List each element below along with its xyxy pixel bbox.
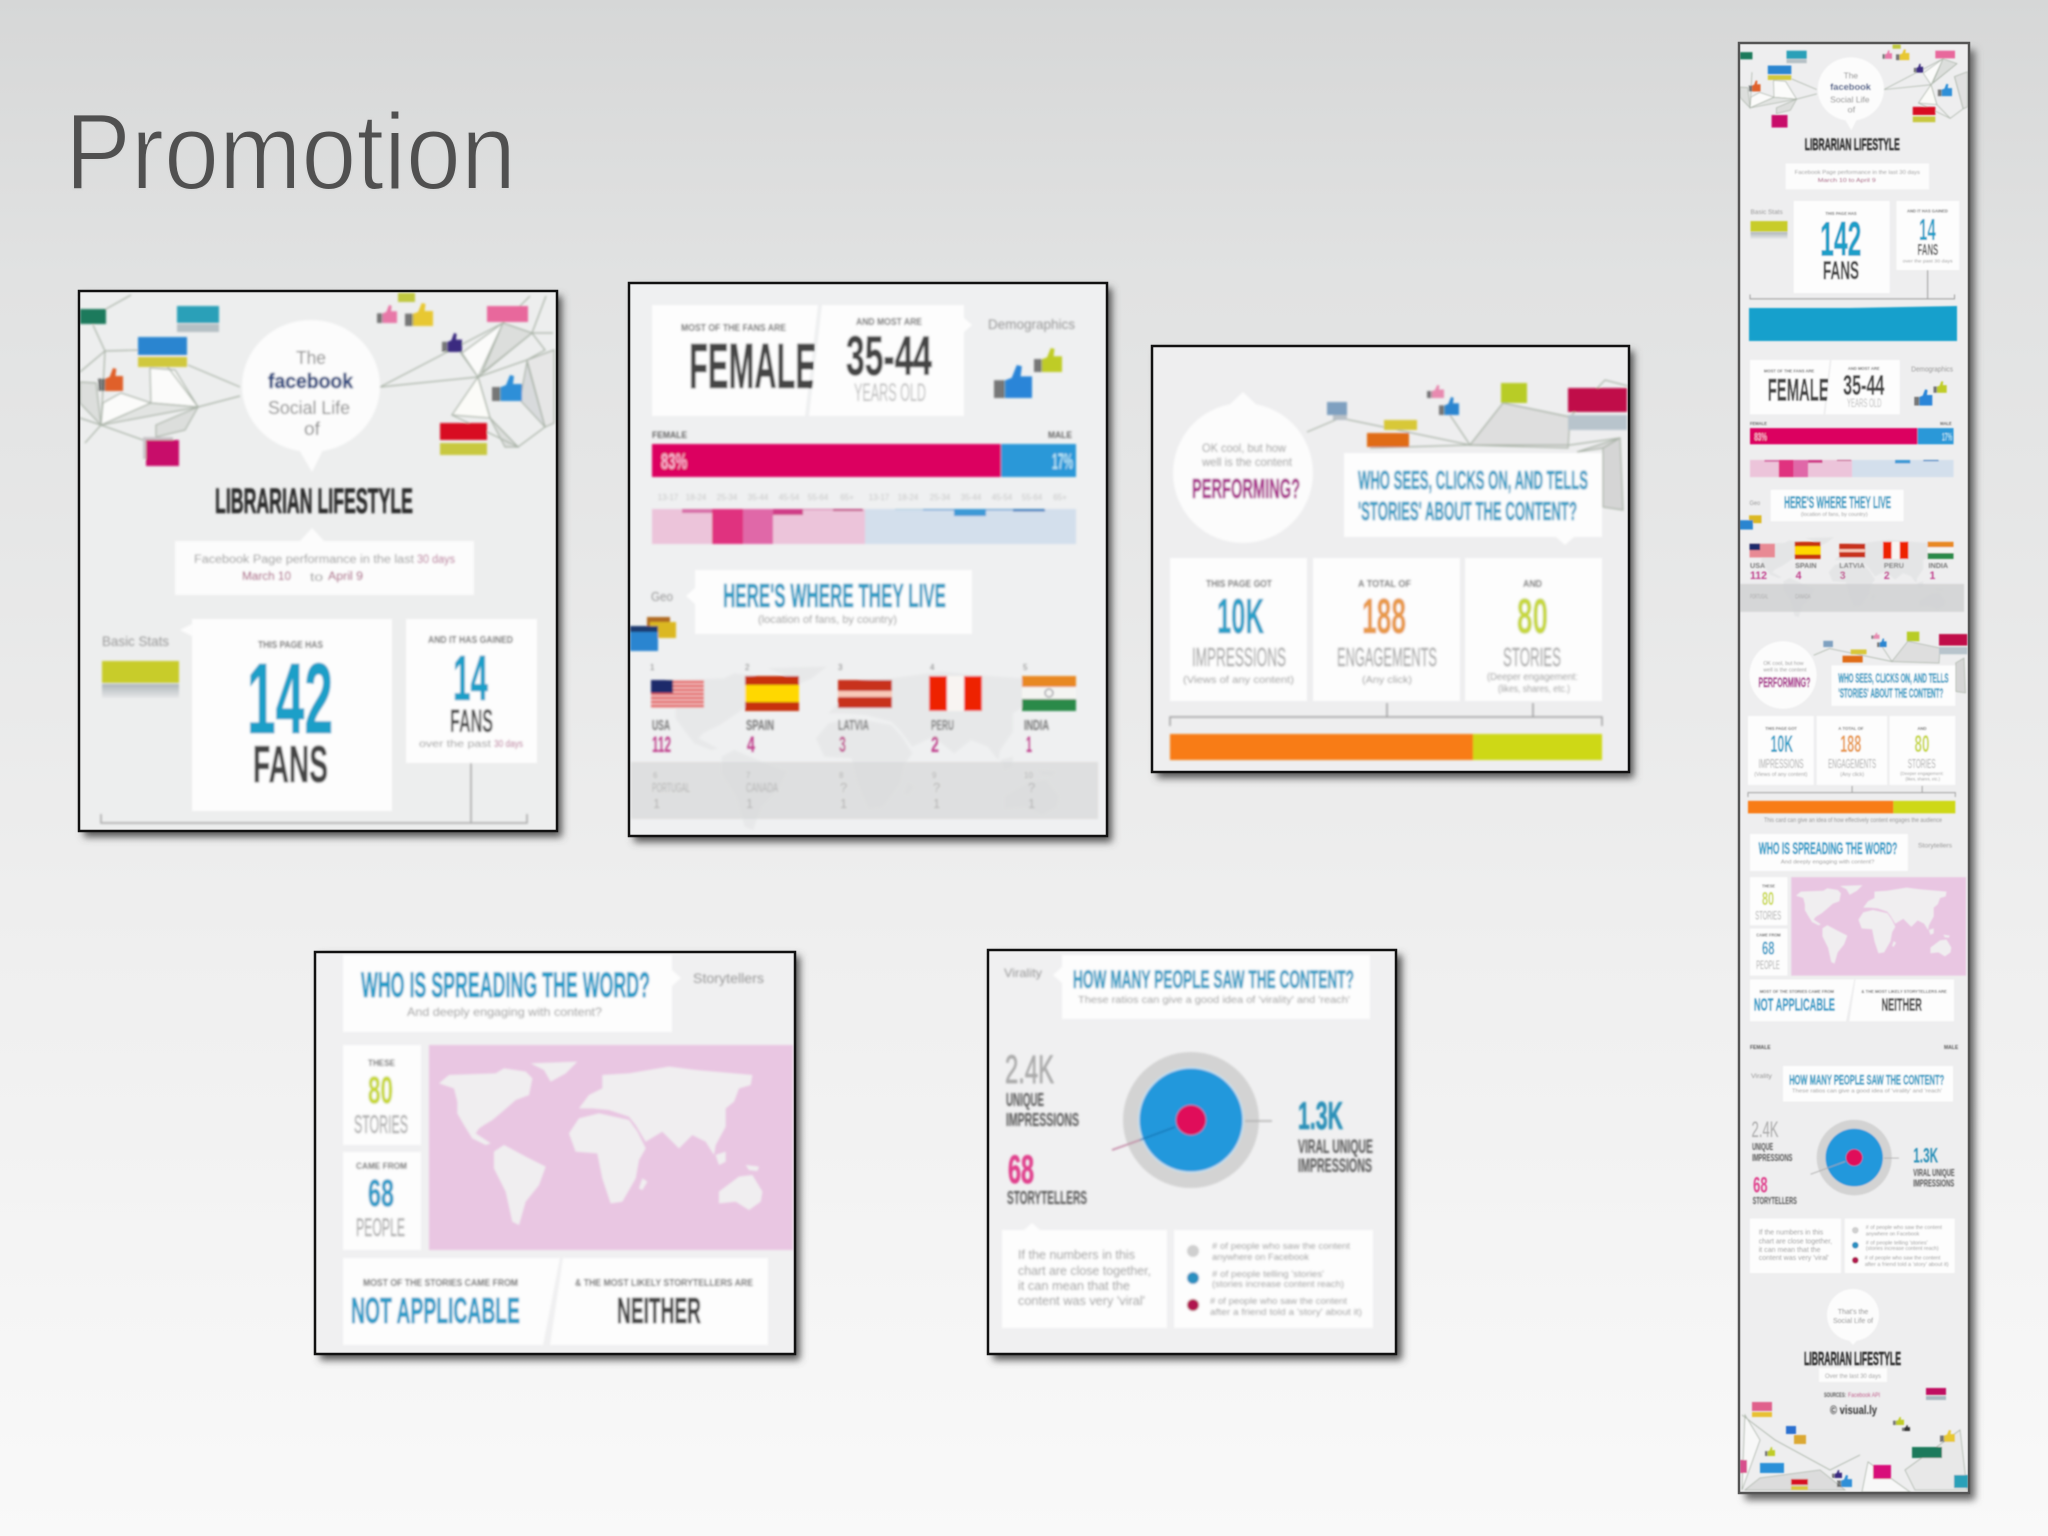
gender headline card: MOST OF THE FANS ARE [681,323,786,334]
thumbnail section: virality: chart are close together, [1759,1239,1832,1246]
stat: viral unique impressions [1298,1095,1373,1177]
thumbnail section: closing [1740,1289,1968,1492]
stat card: engagements [1313,558,1460,701]
heading card: who sees [1344,453,1602,545]
stat card: stories [1465,558,1602,701]
stat card: total fans: 142 [247,643,333,755]
thumbnail section: demographics and geography: MALE [1940,421,1952,426]
network illustration [1307,380,1628,510]
stat card: engagements: A TOTAL OF [1358,579,1411,590]
heading card: where they live: (location of fans, by country) [758,614,897,626]
result card: likely storytellers: & THE MOST LIKELY STORYTELLERS ARE [575,1278,753,1289]
stat card: fans gained [406,619,537,763]
sources line [1824,1393,1880,1399]
result card: source [343,1258,560,1345]
date range box: Facebook Page performance in the last [194,554,415,566]
thumbnail caption: engagement note: This card can give an idea of how effectively content engages the audience [1764,818,1943,824]
country: Spain [745,663,799,757]
age chart: 18-24 [898,493,919,502]
age chart: 45-54 [992,493,1013,502]
age chart: 25-34 [717,493,738,502]
date range box: March 10 [242,571,291,583]
explanation card: If the numbers in this [1018,1248,1135,1262]
faint world map [653,667,1059,830]
other countries band: 6 [653,771,658,780]
stat: unique impressions: 2.4K [1005,1048,1054,1092]
explanation card [1002,1223,1167,1328]
stat card: engagements: (Any click) [1362,674,1412,686]
thumbnail section: fans growth area [1749,306,1957,341]
stat card: total fans [192,619,392,811]
thumbnail section: demographics and geography: MOST OF THE FANS ARE [1764,369,1815,375]
virality label: Virality [1004,966,1042,980]
speech bubble: performing: OK cool, but how [1202,441,1286,455]
thumbnail section: demographics and geography: CANADA [1795,594,1811,601]
date range box: April 9 [328,571,363,583]
stat card: stories: (Deeper engagement: [1487,672,1578,683]
country: Latvia: 3 [838,663,843,672]
country: Latvia: LATVIA [838,717,869,734]
closing network [1742,1415,1967,1492]
thumbnail section: demographics and geography: USA [1750,561,1766,570]
age headline card [809,305,972,416]
thumbnail section: demographics and geography: PORTUGAL [1750,594,1768,601]
thumbnail section: virality: IMPRESSIONS [1913,1177,1954,1189]
date range box [175,528,474,595]
age headline card: YEARS OLD [854,379,926,407]
other countries band: 9 [932,771,937,780]
stat card: total fans: THIS PAGE HAS [258,640,323,651]
thumbnail section: performance: (Deeper engagement: [1900,771,1944,777]
thumbnail section: virality: These ratios can give a good idea of 'virality' and 'reach' [1792,1089,1942,1095]
stat card: stories: 80 [1517,590,1548,644]
thumbnail section: intro and fans: 142 [1820,214,1861,267]
thumbnail section: performance: OK cool, but how [1763,661,1804,667]
thumbnail section: virality: IMPRESSIONS [1752,1153,1793,1164]
timeline bracket [101,763,527,823]
basic stats label and icon [102,624,192,698]
age headline card: 35-44 [846,324,932,387]
stat card: fans gained: over the past [419,739,491,750]
heading card: who sees: WHO SEES, CLICKS ON, AND TELLS [1358,465,1588,495]
stat card: people: PEOPLE [356,1214,405,1242]
legend card [1174,1230,1373,1328]
thumbnail section: virality: # of people telling 'stories' [1866,1241,1928,1247]
stat card: fans gained: 14 [453,642,488,714]
concentric circle chart [1112,1052,1272,1188]
speech bubble: intro: The [296,348,326,368]
thumbnail section: virality: after a friend told a 'story' about it) [1865,1262,1949,1268]
country: Peru: 2 [931,732,939,757]
other countries band: 1 [746,796,753,811]
date range box: 30 days [417,554,455,566]
other countries band: PORTUGAL [652,780,690,795]
network illustration: right [380,296,554,447]
thumbnail section: demographics and geography: 17% [1942,431,1952,443]
thumbnail section: virality: (stories increase content reach) [1866,1246,1939,1252]
basic stats label and icon: Basic Stats [102,633,169,649]
result card: source: MOST OF THE STORIES CAME FROM [363,1278,518,1289]
panel: content performance [1152,346,1634,778]
heading card: where they live: HERE'S WHERE THEY LIVE [723,577,946,614]
thumbnail section: performance: 10K [1771,731,1793,757]
other countries band: ? [840,780,847,795]
stat card: impressions: IMPRESSIONS [1192,642,1286,672]
thumbnail section: storytellers: MOST OF THE STORIES CAME FROM [1760,989,1834,995]
stat: viral unique impressions: IMPRESSIONS [1298,1156,1372,1177]
world map [429,1045,793,1250]
thumbnail section: virality: VIRAL UNIQUE [1913,1167,1955,1179]
stat card: impressions: 10K [1217,590,1264,644]
stat card: stories [343,1045,421,1145]
thumbnail section: intro and fans: over the past 30 days [1903,258,1953,264]
stat: unique impressions: IMPRESSIONS [1006,1110,1079,1130]
legend card: # of people who saw the content [1210,1296,1347,1307]
thumbnail section: intro and fans: Facebook Page performance in the last 30 days [1795,170,1920,176]
country: India: 5 [1023,663,1028,672]
thumbnail section: performance: (likes, shares, etc.) [1905,777,1940,783]
thumbnail section: intro and fans: THIS PAGE HAS [1825,211,1857,217]
thumbnail section: demographics and geography: 4 [1796,570,1802,582]
thumbnail section: intro and fans: 14 [1919,212,1936,247]
floating icons [1327,383,1627,447]
thumbnail section: storytellers: THESE [1762,883,1775,888]
panel: virality [988,950,1402,1360]
other countries band: ? [933,780,940,795]
thumbnail section: demographics and geography: 1 [1930,570,1935,582]
stat card: engagements: 188 [1362,590,1406,644]
age chart: 18-24 [686,493,707,502]
stat card: stories: (likes, shares, etc.) [1498,684,1570,695]
thumbnail section: virality [1750,1066,1955,1273]
other countries band: 8 [839,771,844,780]
thumbnail section: demographics and geography: INDIA [1929,561,1949,570]
heading card: how many people: HOW MANY PEOPLE SAW THE CONTENT? [1073,966,1354,994]
heading card: who sees: 'STORIES' ABOUT THE CONTENT? [1358,496,1577,526]
thumbnail section: demographics and geography: LATVIA [1839,561,1865,570]
country: Spain: SPAIN [746,717,774,734]
result card: likely storytellers [550,1258,768,1345]
closing bubble: That's the [1838,1309,1868,1316]
age chart: 55-64 [1022,493,1043,502]
thumbnail section: virality: anywhere on Facebook [1866,1231,1920,1237]
thumbnail section: demographics and geography: Demographics [1911,367,1954,374]
country: Latvia: 3 [839,732,846,757]
network illustration: left [80,295,240,443]
sources line: SOURCES: [1824,1393,1846,1399]
speech bubble: intro: facebook [268,371,354,393]
panel: demographics and geography [629,283,1112,842]
thumbnail section: intro and fans: FANS [1823,257,1859,285]
thumbnail section: demographics and geography: YEARS OLD [1847,396,1882,410]
thumbnail section: performance: STORIES [1908,757,1936,771]
other countries band: 7 [746,771,751,780]
thumbnail section: intro and fans: LIBRARIAN LIFESTYLE [1805,135,1900,154]
thumbnail section: demographics and geography: FEMALE [1750,421,1767,426]
stat card: fans gained: AND IT HAS GAINED [428,635,513,646]
thumbnail section: intro and fans: The [1844,71,1858,81]
legend card: # of people who saw the content [1212,1241,1350,1252]
thumbnail section: performance: IMPRESSIONS [1759,757,1804,771]
age chart: 13-17 [869,493,890,502]
title: Promotion [65,91,516,213]
legend card: # of people telling 'stories' [1212,1269,1324,1280]
thumbnail section: demographics and geography [1739,360,1964,617]
thumbnail section: demographics and geography: Geo [1750,500,1761,507]
thumbnail section: virality: content was very 'viral' [1759,1255,1829,1262]
age headline card: AND MOST ARE [856,317,922,328]
stat card: impressions: THIS PAGE GOT [1206,579,1272,590]
speech bubble: performing [1173,392,1313,543]
bracket lines [1170,703,1602,726]
stat card: impressions: (Views of any content) [1183,674,1294,686]
gender split bar [652,430,1076,477]
thumbnail section: performance: A TOTAL OF [1838,726,1864,732]
other countries band: CANADA [746,780,778,795]
gender split bar: 83% [661,449,687,474]
visual.ly logo: © visual.ly [1830,1403,1877,1417]
country: Spain: 4 [747,732,755,757]
thumbnail section: performance: PERFORMING? [1759,675,1810,690]
thumbnail small labels [1750,1045,1959,1051]
sources line: Facebook API [1848,1393,1880,1399]
thumbnail section: demographics and geography: 112 [1750,570,1767,582]
thumbnail section: performance: well is the content [1762,668,1807,674]
thumbnail section: virality: it can mean that the [1759,1247,1821,1254]
stat card: fans gained: FANS [450,703,493,739]
thumbnail section: demographics and geography: 83% [1754,431,1767,443]
stat card: people: 68 [368,1173,394,1215]
panel: facebook social life intro [79,291,562,837]
legend card: after a friend told a 'story' about it) [1210,1307,1362,1318]
thumbnail section: virality: If the numbers in this [1759,1230,1824,1237]
closing bubble: Social Life of [1833,1318,1873,1325]
panel: storytellers [315,952,800,1360]
country: India: INDIA [1024,717,1049,734]
age chart: 55-64 [808,493,829,502]
thumbnail small labels: FEMALE [1750,1045,1771,1051]
thumbnail section: storytellers: Storytellers [1918,842,1952,849]
result card: likely storytellers: NEITHER [617,1290,701,1331]
other countries band [631,762,1098,819]
thumbnail section: demographics and geography: 2 [1884,570,1890,582]
country: USA [650,663,704,757]
heading: page name: LIBRARIAN LIFESTYLE [215,482,413,521]
thumbnail section: storytellers: PEOPLE [1756,958,1780,972]
age chart: 65+ [1053,493,1067,502]
thumbnail section: demographics and geography: 35-44 [1843,369,1884,400]
thumbnail section: demographics and geography: HERE'S WHERE THEY LIVE [1784,495,1891,512]
stat card: impressions [1170,558,1307,701]
thumbnail section: virality: 68 [1753,1172,1768,1198]
thumbnail section: storytellers: And deeply engaging with content? [1781,859,1874,865]
closing bubble [1827,1289,1879,1345]
other countries band: 1 [653,796,660,811]
stat: storytellers [1007,1148,1087,1208]
stat card: stories: STORIES [1503,642,1561,672]
thumbnail section: virality: STORYTELLERS [1753,1196,1797,1207]
heading card: where they live [686,570,972,634]
explanation card: content was very 'viral' [1018,1294,1145,1308]
country: India [1022,663,1076,757]
top five countries [650,663,1076,757]
age chart: 25-34 [930,493,951,502]
stat: storytellers: 68 [1008,1148,1034,1192]
country: India: 1 [1026,732,1032,757]
thumbnail section: performance: THIS PAGE GOT [1765,726,1797,732]
thumbnail section: performance: AND [1917,726,1927,732]
stat card: stories: THESE [368,1058,395,1068]
thumbnail section: storytellers: 68 [1762,937,1774,958]
legend card: anywhere on Facebook [1212,1252,1309,1263]
thumbnail section: performance: 188 [1840,731,1861,757]
thumbnail section: virality: Virality [1751,1073,1773,1080]
closing icons [1740,1388,1968,1490]
other countries band: 10 [1024,771,1033,780]
thumbnail section: storytellers [1750,834,1966,1021]
thumbnail section: performance: ENGAGEMENTS [1828,757,1876,771]
stat: viral unique impressions: 1.3K [1298,1095,1343,1138]
thumbnail section: virality: # of people who saw the content [1866,1225,1943,1231]
thumbnail section: demographics and geography: 3 [1840,570,1846,582]
thumbnail section: performance: (Views of any content) [1754,772,1808,778]
thumbnail section: storytellers: 80 [1762,888,1774,909]
country: USA: 112 [652,732,671,757]
thumbnail section: virality: 2.4K [1752,1117,1779,1142]
thumbnail section: virality: UNIQUE [1752,1142,1773,1153]
legend card: (stories increase content reach) [1212,1279,1344,1290]
thumbnail section: storytellers: & THE MOST LIKELY STORYTELLERS ARE [1861,989,1947,995]
stat card: fans gained: 30 days [494,739,523,750]
thumbnail section: intro and fans: facebook [1830,82,1872,93]
thumbnail section: intro and fans: March 10 to April 9 [1818,178,1876,184]
stat card: engagements: ENGAGEMENTS [1337,642,1437,672]
other countries band: 1 [933,796,940,811]
stat: storytellers: STORYTELLERS [1007,1188,1087,1208]
gender headline card [652,305,818,416]
thumbnail section: performance [1748,632,1967,813]
country: Peru [929,663,982,757]
thumbnail small labels: MALE [1944,1045,1959,1051]
thumbnail section: intro and fans: Basic Stats [1751,209,1783,216]
country: USA: 1 [650,663,655,672]
speech bubble: intro: of [304,419,321,439]
country: USA: USA [652,717,670,734]
thumbnail section: intro and fans [1740,44,1967,299]
geo label and icons: Geo [651,589,673,604]
heading card: spreading the word: And deeply engaging with content? [407,1005,602,1019]
speech bubble: performing: well is the content [1201,455,1293,469]
thumbnail section: closing: LIBRARIAN LIFESTYLE [1804,1349,1901,1369]
thumbnail section: storytellers: NEITHER [1882,995,1922,1015]
closing date box: Over the last 30 days [1825,1374,1881,1380]
other countries band: ? [1028,780,1035,795]
panel: demographics and geography: FEMALE [689,330,816,402]
thumbnail section: virality: # of people who saw the content [1865,1256,1941,1262]
thumbnail section: performance: 80 [1915,731,1929,757]
thumbnail section: intro and fans: of [1847,105,1856,115]
thumbnail section: storytellers: CAME FROM [1756,933,1781,938]
thumbnail section: storytellers: WHO IS SPREADING THE WORD? [1759,839,1897,858]
gender split bar: FEMALE [652,430,687,440]
gender split bar: MALE [1048,430,1072,440]
engagement bar [1170,734,1602,760]
heading card: spreading the word [343,955,681,1032]
thumbnail section: performance: (Any click) [1840,772,1864,778]
stat card: total fans: FANS [253,736,328,794]
stat: viral unique impressions: VIRAL UNIQUE [1298,1137,1373,1158]
heading card: how many people: These ratios can give a good idea of 'virality' and 'reach' [1078,994,1350,1006]
result card: source: NOT APPLICABLE [351,1290,520,1331]
thumbnail section: virality: 1.3K [1913,1143,1938,1168]
speech bubble: intro [242,320,380,472]
thumbnail section: intro and fans: FANS [1918,242,1938,259]
panel: full infographic thumbnail [1739,43,1975,1500]
date range box: to [310,572,323,584]
stat: unique impressions [1005,1048,1079,1130]
other countries band: 1 [1028,796,1035,811]
thumbnail section: intro and fans: AND IT HAS GAINED [1907,208,1948,214]
age chart: 65+ [840,493,854,502]
heading card: spreading the word: WHO IS SPREADING THE WORD? [361,966,650,1005]
heading card: how many people [1053,955,1370,1019]
country: Spain: 2 [745,663,750,672]
demographics label and thumbs [988,316,1075,398]
thumbnail section: demographics and geography: (location of fans, by country) [1801,512,1868,518]
thumbnail section: performance: 'STORIES' ABOUT THE CONTENT? [1838,687,1943,701]
thumbnail section: intro and fans: Social Life [1830,95,1870,105]
stat card: people [343,1152,421,1250]
age chart: 35-44 [961,493,982,502]
age chart: 35-44 [748,493,769,502]
stat card: stories: STORIES [354,1111,408,1139]
floating icons [80,293,528,466]
stat card: stories: AND [1523,579,1542,590]
speech bubble: intro: Social Life [268,398,350,418]
thumbnail section: demographics and geography: FEMALE [1768,372,1829,408]
thumbnail section: storytellers: NOT APPLICABLE [1754,995,1835,1015]
storytellers label: Storytellers [693,971,764,986]
other countries band: 1 [840,796,847,811]
country: Peru: PERU [931,717,954,734]
age chart [652,493,1076,544]
speech bubble: performing: PERFORMING? [1192,473,1300,504]
thumbnail section: demographics and geography: PERU [1884,561,1904,570]
country: Peru: 4 [930,663,935,672]
gender split bar: 17% [1052,449,1073,474]
explanation card: it can mean that the [1018,1279,1130,1293]
thumbnail section: demographics and geography: SPAIN [1795,561,1817,570]
stat card: stories: 80 [368,1070,393,1112]
geo label and icons [630,589,676,651]
stat: unique impressions: UNIQUE [1006,1090,1044,1110]
country: Latvia [838,663,892,757]
demographics label and thumbs: Demographics [988,316,1075,332]
thumbnail section: storytellers: STORIES [1755,908,1781,922]
stat card: people: CAME FROM [356,1161,407,1171]
age chart: 13-17 [658,493,679,502]
thumbnail section: demographics and geography: AND MOST ARE [1848,366,1880,372]
explanation card: chart are close together, [1018,1264,1151,1278]
age chart: 45-54 [779,493,800,502]
closing date box [1819,1368,1887,1382]
